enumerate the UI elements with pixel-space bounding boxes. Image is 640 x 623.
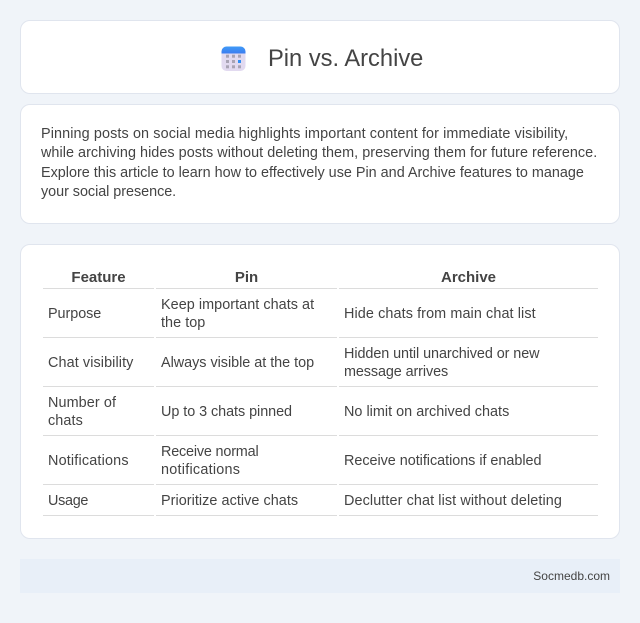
row: chat visibility: message arrives [344, 364, 448, 380]
panel: comparison table [20, 244, 620, 539]
panel: title card [20, 20, 620, 94]
row: number of chats: chats [48, 413, 83, 429]
row: purpose: Keep important chats at [161, 297, 314, 313]
row: number of chats: No limit on archived chats [344, 404, 509, 420]
footer credit: Socmedb.com [533, 569, 610, 583]
row: purpose [48, 297, 536, 331]
row: chat visibility: Chat visibility [48, 355, 133, 371]
row: purpose: Hide chats from main chat list [344, 306, 536, 322]
intro text: your social presence. [41, 184, 176, 200]
row: number of chats [48, 395, 509, 429]
intro text: while archiving hides posts without deleting them, preserving them for future reference. [41, 145, 597, 161]
row: notifications: notifications [161, 462, 240, 478]
row: number of chats: Up to 3 chats pinned [161, 404, 292, 420]
row: usage: Prioritize active chats [161, 493, 298, 509]
row: usage: Declutter chat list without deleting [344, 493, 562, 509]
title: Pin vs. Archive [268, 46, 423, 72]
table header: Feature [71, 269, 126, 286]
row: notifications: Receive normal [161, 444, 258, 460]
row: usage [48, 493, 562, 509]
row: chat visibility: Always visible at the top [161, 355, 314, 371]
row: chat visibility: Hidden until unarchived or new [344, 346, 540, 362]
table header: Pin [235, 269, 258, 286]
icon: calendar [222, 46, 246, 71]
row: usage: Usage [48, 493, 88, 509]
row: purpose: the top [161, 315, 205, 331]
row: purpose: Purpose [48, 306, 101, 322]
footer bar [20, 559, 620, 593]
intro text: Explore this article to learn how to effectively use Pin and Archive features to manage [41, 165, 584, 181]
intro text [41, 126, 597, 200]
row: number of chats: Number of [48, 395, 116, 411]
row: notifications [48, 444, 541, 478]
comparison table [43, 269, 598, 516]
row: notifications: Receive notifications if enabled [344, 453, 541, 469]
row: notifications: Notifications [48, 453, 129, 469]
intro text: Pinning posts on social media highlights important content for immediate visibility, [41, 126, 568, 142]
table header [71, 269, 496, 286]
panel: introduction [20, 104, 620, 224]
row: chat visibility [48, 346, 540, 380]
table header: Archive [441, 269, 496, 286]
